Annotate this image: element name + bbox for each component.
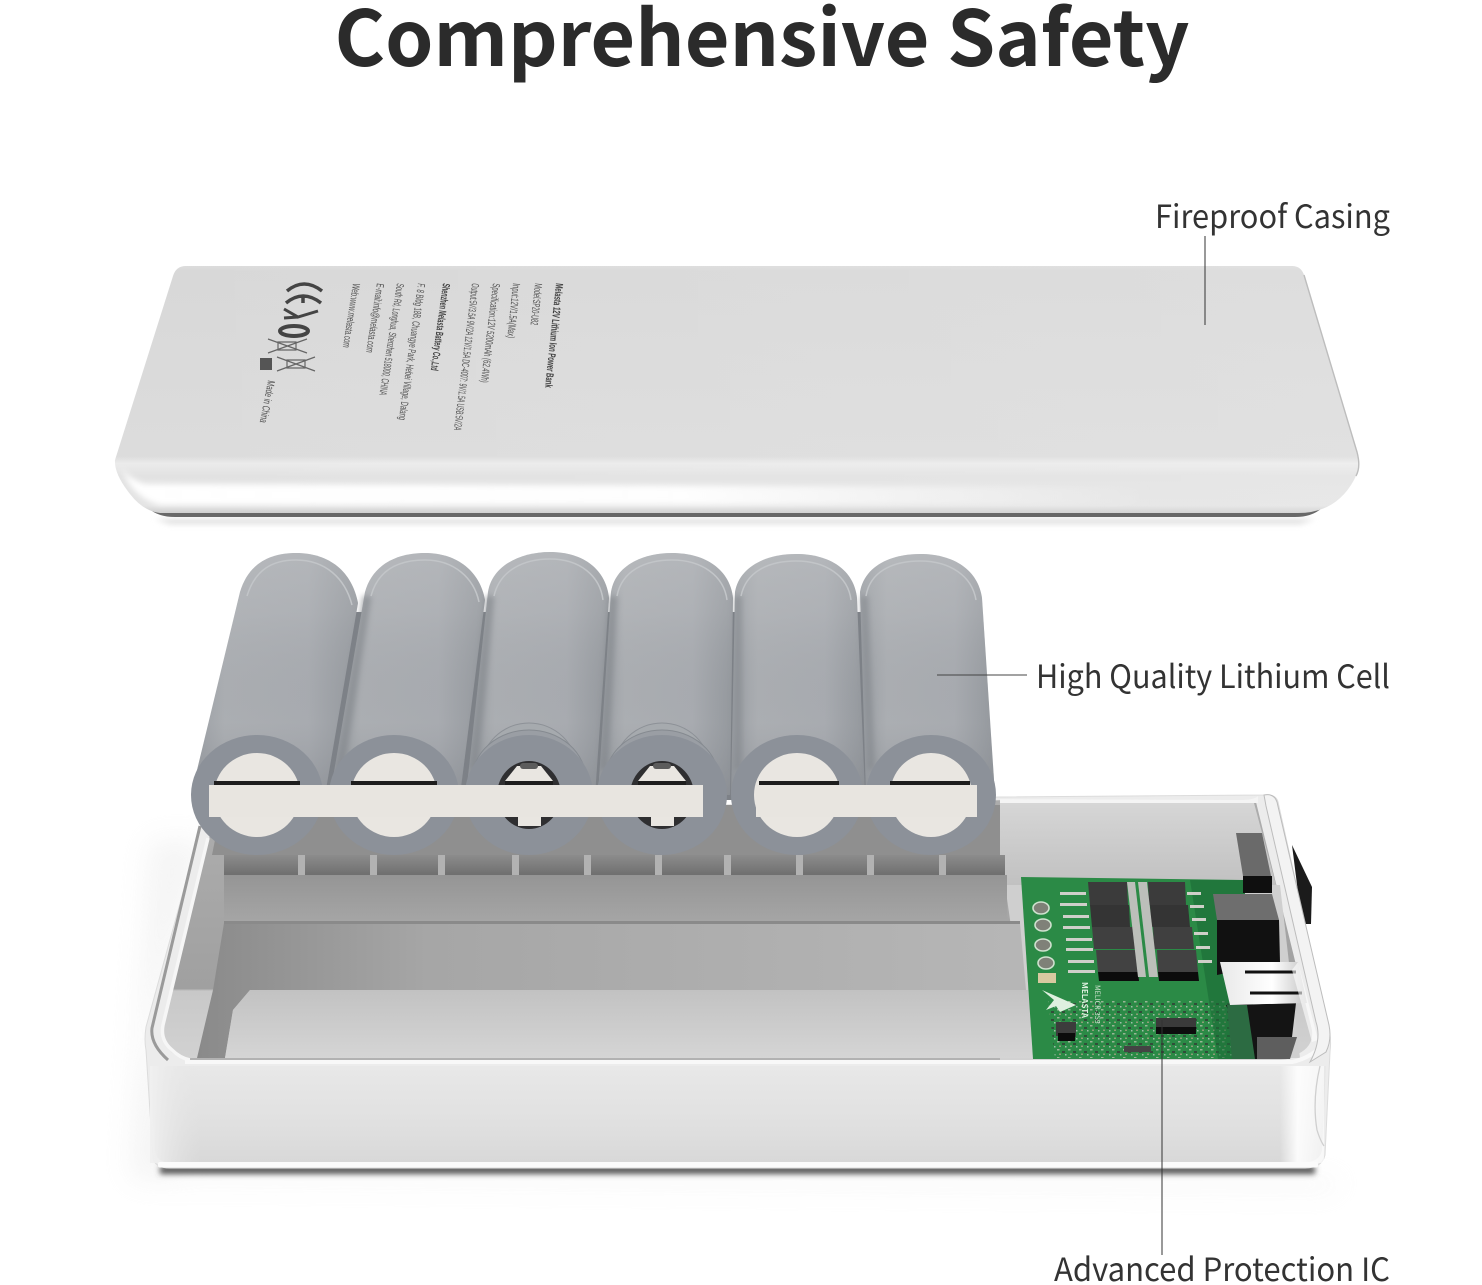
cell 2: [329, 553, 485, 855]
cell 6: [860, 554, 996, 855]
lid printed text: E-mail:info@melasta.com: [363, 283, 386, 354]
right connectors: [1213, 833, 1297, 1059]
lid printed text: Melasta 12V Lithium Ion Power Bank: [542, 283, 565, 388]
lid printed text: Output:5V/3.5A 9V/2A 12V/1.5A DC-4007: 9V/1.5A USB:5V/2A: [451, 283, 481, 431]
front face: [150, 1066, 1326, 1163]
lid printed text: Input:12V/1.5A(Max): [504, 283, 522, 339]
casing ground shadow: [160, 1166, 1315, 1174]
wall under batteries: [212, 805, 1000, 855]
soft shadow behind lower casing: [130, 840, 1345, 1190]
lid printed text: [257, 283, 565, 431]
pcb ICs: [1056, 1022, 1076, 1036]
lid printed text: Web:www.melasta.com: [340, 283, 362, 349]
metal strip A: [209, 781, 703, 817]
pcb center strip: [1127, 882, 1158, 977]
left rim lines: [152, 826, 200, 1060]
pcb logo: MELICR-3S5: [1092, 985, 1102, 1024]
lid printed text: Model:SP20-U82: [528, 283, 544, 326]
cavity floor: [225, 990, 1036, 1058]
rib row: [224, 855, 1005, 875]
label: high quality lithium cell: High Quality Lithium Cell: [1036, 652, 1390, 698]
lid printed text: Shenzhen Melasta Battery Co.,Ltd: [428, 283, 452, 371]
PCB board: [1021, 877, 1257, 1059]
lid printed text: F. 8 Bldg 18B, Chuangye Park, Hebei Village, Dalang: [396, 283, 427, 421]
cavity: [162, 800, 1312, 1060]
lid highlight band: [118, 462, 1150, 505]
cell 1: [191, 553, 358, 855]
lid certification symbols: [260, 284, 322, 371]
right wall: [1264, 795, 1330, 1062]
lid printed text: Made in China: [257, 379, 277, 424]
pcb resistors: [1060, 892, 1212, 973]
pcb logo: MELASTA: [1079, 982, 1090, 1019]
cavity wall and left strip: [197, 923, 1026, 1058]
lid body: [115, 266, 1358, 513]
panel: lid / top casing: [115, 266, 1359, 524]
panel: lower casing: [145, 795, 1331, 1174]
label: fireproof casing: Fireproof Casing: [1155, 192, 1390, 238]
back wall: [1000, 803, 1280, 900]
pcb black chips: [1088, 882, 1199, 981]
lid printed text: South Rd, Longhua, Shenzhen 518000, CHINA: [376, 283, 406, 396]
pcb pads: [1033, 902, 1054, 969]
side button: [1292, 845, 1312, 924]
casing front rim: [185, 1040, 1328, 1062]
pcb logo: [1042, 982, 1102, 1024]
cell 4 (positive end): [597, 553, 733, 855]
cell 3 (positive end): [465, 552, 609, 855]
cell 5: [731, 554, 865, 855]
battery cells: [191, 552, 996, 855]
bottom front highlight: [158, 1162, 1318, 1168]
USB port: [1220, 962, 1318, 1042]
lid printed text: Specification:12V 5200mAh (62.4Wh): [478, 283, 502, 383]
rib bar: [224, 875, 1007, 923]
metal strip B: [756, 781, 977, 817]
casing shell: [145, 795, 1331, 1168]
